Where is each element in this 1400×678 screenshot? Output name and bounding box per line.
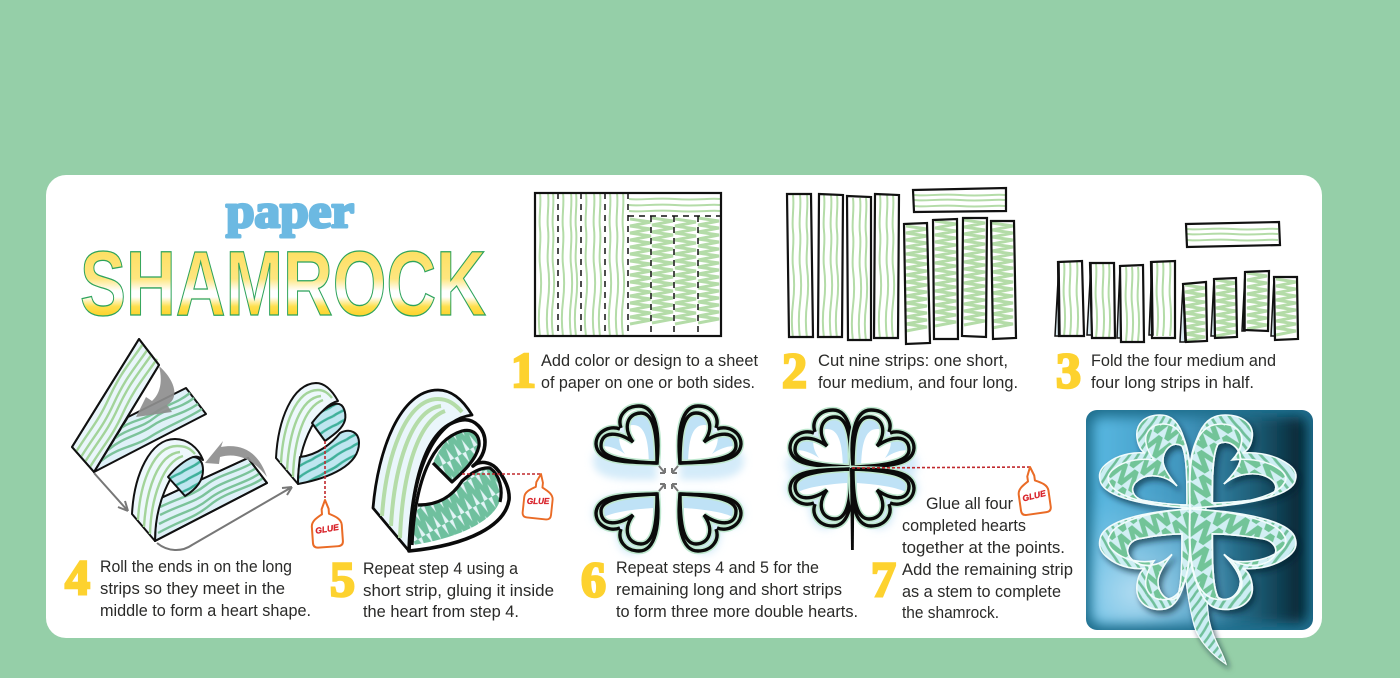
step 5: double heart xyxy=(373,390,509,551)
step 1 text: Add color or design to a sheet xyxy=(541,352,758,370)
step 2: nine cut strips xyxy=(787,188,1016,344)
step 7 text: Add the remaining strip xyxy=(902,561,1073,579)
step 1 text xyxy=(511,342,758,398)
heart bottom right xyxy=(679,494,744,558)
leaf top left xyxy=(1100,415,1191,508)
step 2 text: 2 xyxy=(782,342,807,398)
glue line step 4 xyxy=(324,441,326,498)
step 1 text: 1 xyxy=(511,342,536,398)
step 6 text xyxy=(581,551,858,621)
icon: glue bottle step 7: GLUE xyxy=(1021,488,1047,503)
step 2 text xyxy=(782,342,1018,398)
step 6 text: remaining long and short strips xyxy=(616,581,842,599)
step 2 text: Cut nine strips: one short, xyxy=(818,352,1008,370)
icon: glue bottle step 5 xyxy=(522,473,555,520)
step 7 text: as a stem to complete xyxy=(902,583,1061,601)
icon: glue bottle step 4: GLUE xyxy=(315,522,340,536)
step 7 text: the shamrock. xyxy=(902,604,999,622)
heart top right xyxy=(679,406,744,480)
title word: paper: paper xyxy=(226,185,354,238)
step 5 text: 5 xyxy=(330,551,355,607)
step 3: folded strips xyxy=(1055,222,1298,342)
arrow: roll inward xyxy=(205,441,267,477)
title xyxy=(80,185,486,335)
leaf top right xyxy=(1189,415,1296,508)
arrow: fold down xyxy=(136,366,174,417)
step 4 text: strips so they meet in the xyxy=(100,580,285,598)
step 7: assembled hearts and stem xyxy=(786,410,918,550)
step 4 text: 4 xyxy=(65,549,90,605)
step 3 text: 3 xyxy=(1056,342,1081,398)
step 4: glued heart xyxy=(276,383,359,484)
arrow: to rolled strip xyxy=(94,473,128,511)
step 5 text xyxy=(330,551,554,621)
step 7 text: Glue all four xyxy=(926,495,1013,513)
leaf bottom right xyxy=(1189,509,1296,609)
step 6 text: to form three more double hearts. xyxy=(616,603,858,621)
stem xyxy=(1182,505,1226,664)
leaf bottom left xyxy=(1100,509,1191,609)
step 6 text: Repeat steps 4 and 5 for the xyxy=(616,559,819,577)
step 3 text: Fold the four medium and xyxy=(1091,352,1276,370)
step 2 text: four medium, and four long. xyxy=(818,374,1018,392)
step 7 text: completed hearts xyxy=(902,517,1026,535)
finished shamrock picture: background box xyxy=(1086,410,1313,630)
title word: SHAMROCK: SHAMROCK xyxy=(80,233,486,335)
step 5 text: short strip, gluing it inside xyxy=(363,582,554,600)
icon: glue bottle step 4 xyxy=(310,499,343,548)
finished shamrock xyxy=(1100,415,1296,664)
step 5 text: Repeat step 4 using a xyxy=(363,560,519,578)
step 6 text: 6 xyxy=(581,551,606,607)
step 4 text: Roll the ends in on the long xyxy=(100,558,292,576)
glue line step 5 xyxy=(462,473,541,475)
stem xyxy=(850,468,854,550)
step 5 text: the heart from step 4. xyxy=(363,603,519,621)
step 7 text xyxy=(871,495,1073,622)
icon: glue bottle step 7 xyxy=(1015,465,1051,516)
step 1: illustration of decorated sheet xyxy=(535,193,721,336)
icon: glue bottle step 5: GLUE xyxy=(527,497,550,506)
step 4 text xyxy=(65,549,311,620)
step 7 text: 7 xyxy=(871,551,896,607)
heart bottom left xyxy=(593,494,658,558)
step 4: rolled strip xyxy=(132,439,267,541)
step 4 text: middle to form a heart shape. xyxy=(100,602,311,620)
step 3 text: four long strips in half. xyxy=(1091,374,1254,392)
glue line step 7 xyxy=(852,467,1030,468)
arrows pointing to centre xyxy=(659,466,678,491)
step 4: folded strip flat xyxy=(72,339,206,472)
step 7 text: together at the points. xyxy=(902,539,1065,557)
step 3 text xyxy=(1056,342,1276,398)
white panel xyxy=(46,175,1322,638)
arrow: to heart xyxy=(157,487,292,550)
heart top left xyxy=(593,406,658,480)
step 1 text: of paper on one or both sides. xyxy=(541,374,755,392)
step 6: four double hearts xyxy=(593,406,744,558)
